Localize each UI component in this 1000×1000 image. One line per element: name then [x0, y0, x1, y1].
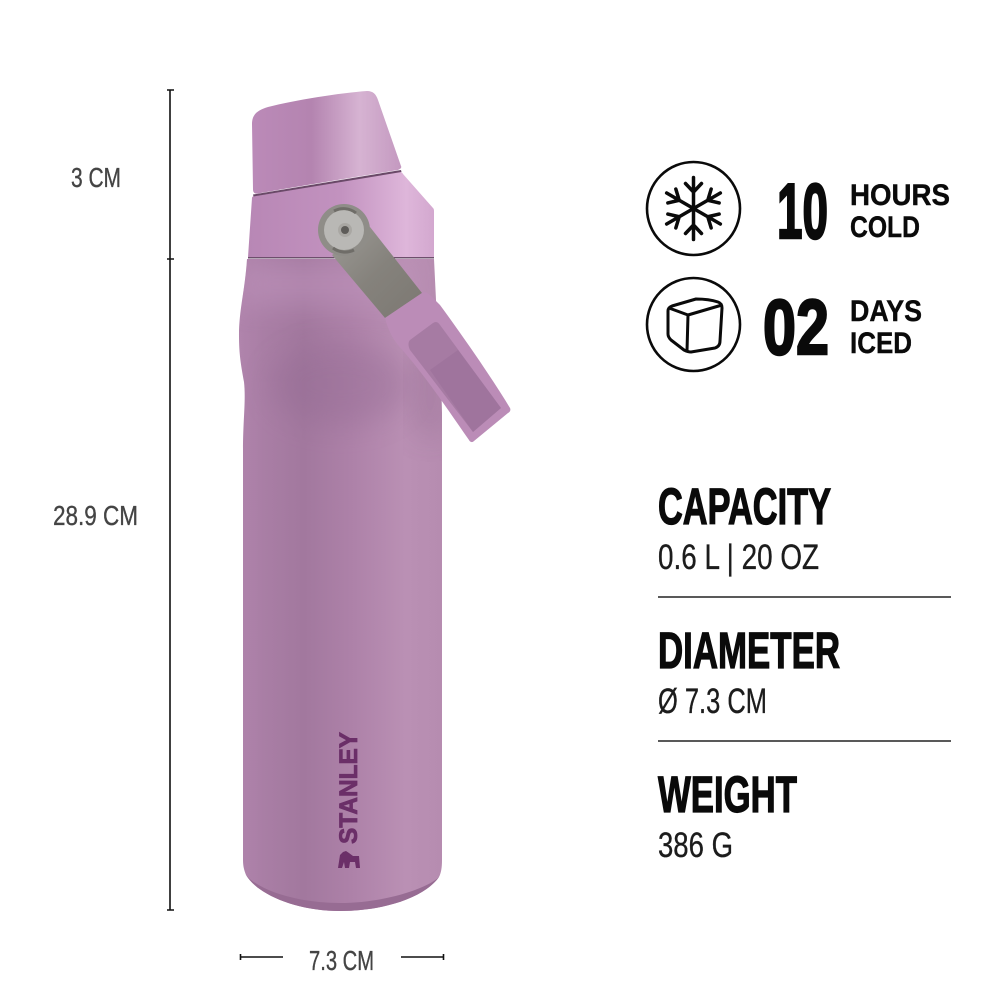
number: 02: 02	[763, 283, 829, 371]
value: diameter: Ø 7.3 CM	[658, 682, 767, 721]
icon: bear logo	[338, 851, 360, 868]
label: DAYS: DAYS	[850, 295, 922, 328]
stat: 02 days iced	[647, 278, 922, 371]
bottle collar	[248, 172, 434, 257]
spec: weight	[658, 766, 797, 865]
value: weight: 386 G	[658, 826, 733, 865]
spec: diameter	[658, 622, 840, 721]
handle grip	[385, 292, 510, 442]
stat: 10 hours cold	[647, 162, 950, 255]
label: HOURS: HOURS	[850, 179, 950, 212]
label: 3 CM: 3 CM	[71, 162, 121, 193]
spec: diameter: DIAMETER	[658, 622, 840, 679]
spec: weight: WEIGHT	[658, 766, 797, 823]
spec: capacity: CAPACITY	[658, 478, 831, 535]
dimension: width	[240, 945, 444, 976]
icon: snowflake	[647, 162, 740, 255]
label: ICED: ICED	[850, 327, 912, 360]
handle strap	[318, 204, 422, 318]
bottle	[239, 91, 510, 911]
dimension line: height	[167, 90, 174, 910]
label: 7.3 CM: 7.3 CM	[309, 945, 374, 976]
bottle body	[239, 259, 445, 911]
bottle lid	[252, 91, 401, 194]
icon: ice cube	[647, 278, 740, 371]
logo: STANLEY: STANLEY	[335, 732, 363, 844]
label: COLD: COLD	[850, 211, 920, 244]
number: 10: 10	[777, 167, 828, 255]
spec: capacity	[658, 478, 831, 577]
value: capacity: 0.6 L | 20 OZ	[658, 538, 819, 577]
label: 28.9 CM: 28.9 CM	[53, 500, 138, 531]
